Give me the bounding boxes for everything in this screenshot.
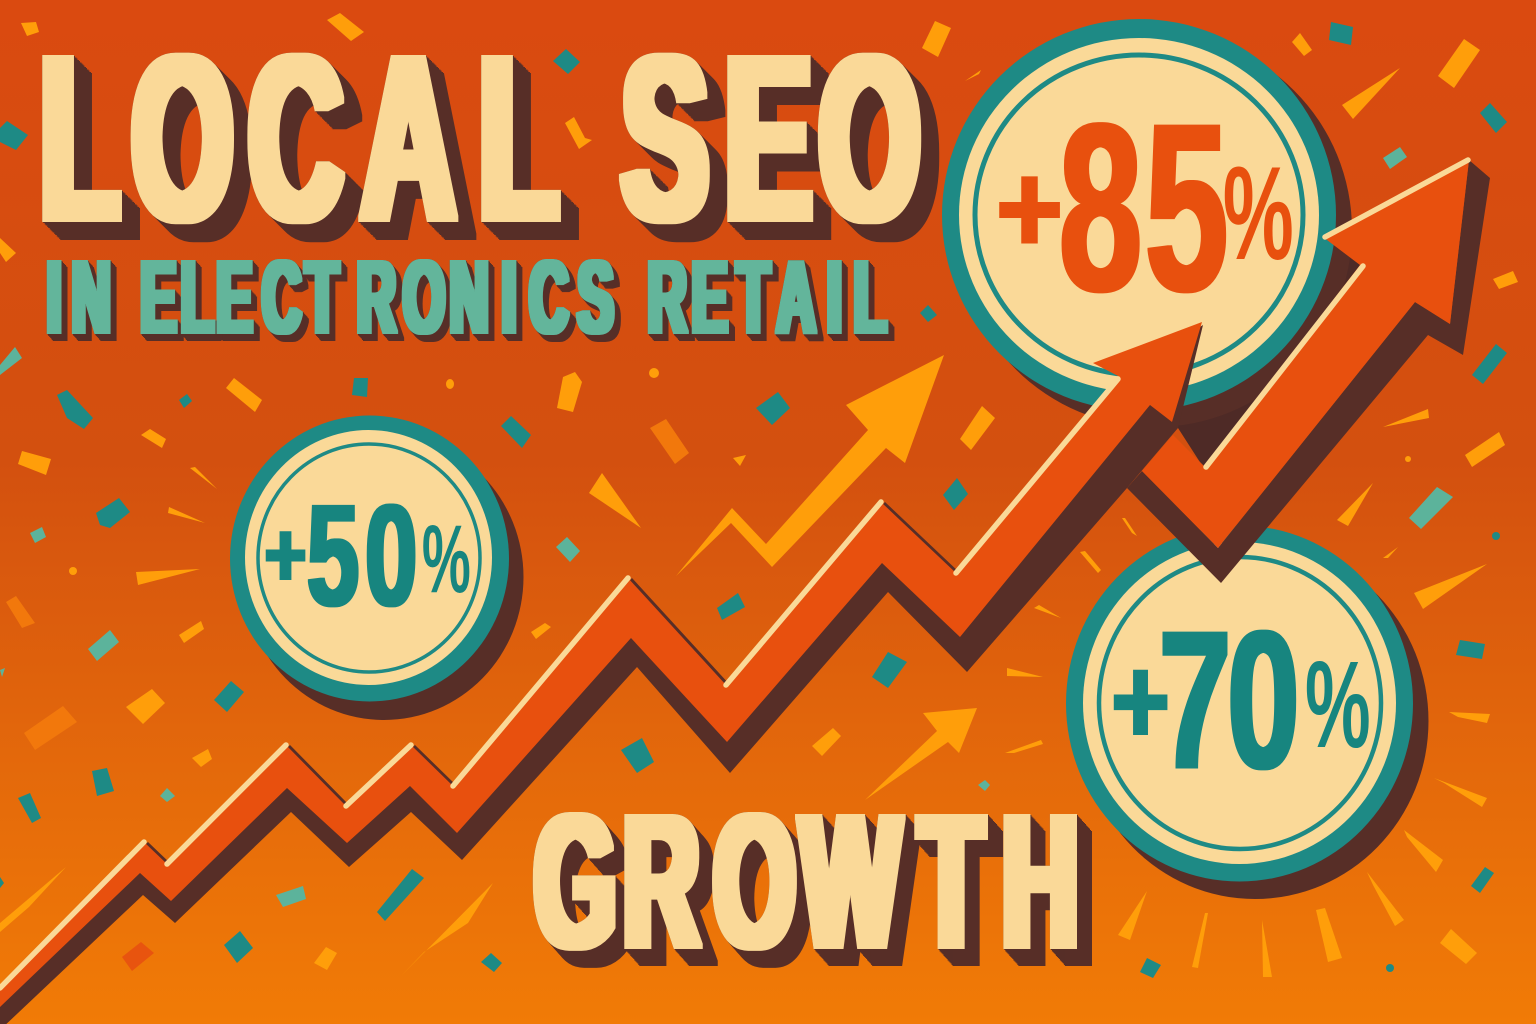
subtitle: IN ELECTRONICS RETAIL: IN ELECTRONICS RETAIL <box>47 241 887 355</box>
badge value: +50% <box>265 475 471 636</box>
badge value: +85%: 85 <box>1059 74 1228 341</box>
arrow cream highlights <box>0 160 1468 988</box>
badge value: +85%: % <box>1223 140 1294 288</box>
arrow: small amber lower arrow <box>865 708 977 800</box>
heading: GROWTH: GROWTH <box>534 777 1078 987</box>
badge value: +70% <box>1112 591 1371 810</box>
dark shadow wedge behind second arrow <box>1160 236 1362 470</box>
arrow: small amber zigzag arrow <box>676 355 944 576</box>
confetti: orange pieces <box>6 419 689 971</box>
badge value: +70%: % <box>1305 637 1371 774</box>
badge value: +70%: 70 <box>1159 591 1299 810</box>
arrow body upper segment <box>1142 160 1469 548</box>
badge: +85% <box>942 19 1352 427</box>
arrow shadow <box>0 325 1203 1024</box>
badge: +70% <box>1066 526 1428 899</box>
badge value: +70%: + <box>1112 631 1169 771</box>
title: LOCAL SEO: LOCAL SEO <box>40 9 920 270</box>
badge: +50% <box>230 416 524 720</box>
confetti: light teal pieces <box>0 147 1453 907</box>
arrow body lower segment <box>0 322 1202 1007</box>
badge value: +85% <box>996 74 1294 341</box>
badge value: +85%: + <box>996 137 1062 280</box>
badge value: +50%: + <box>265 504 306 606</box>
arrow second segment shadow <box>1127 160 1490 583</box>
badge value: +50%: 50 <box>307 475 417 636</box>
badge value: +50%: % <box>422 505 471 613</box>
